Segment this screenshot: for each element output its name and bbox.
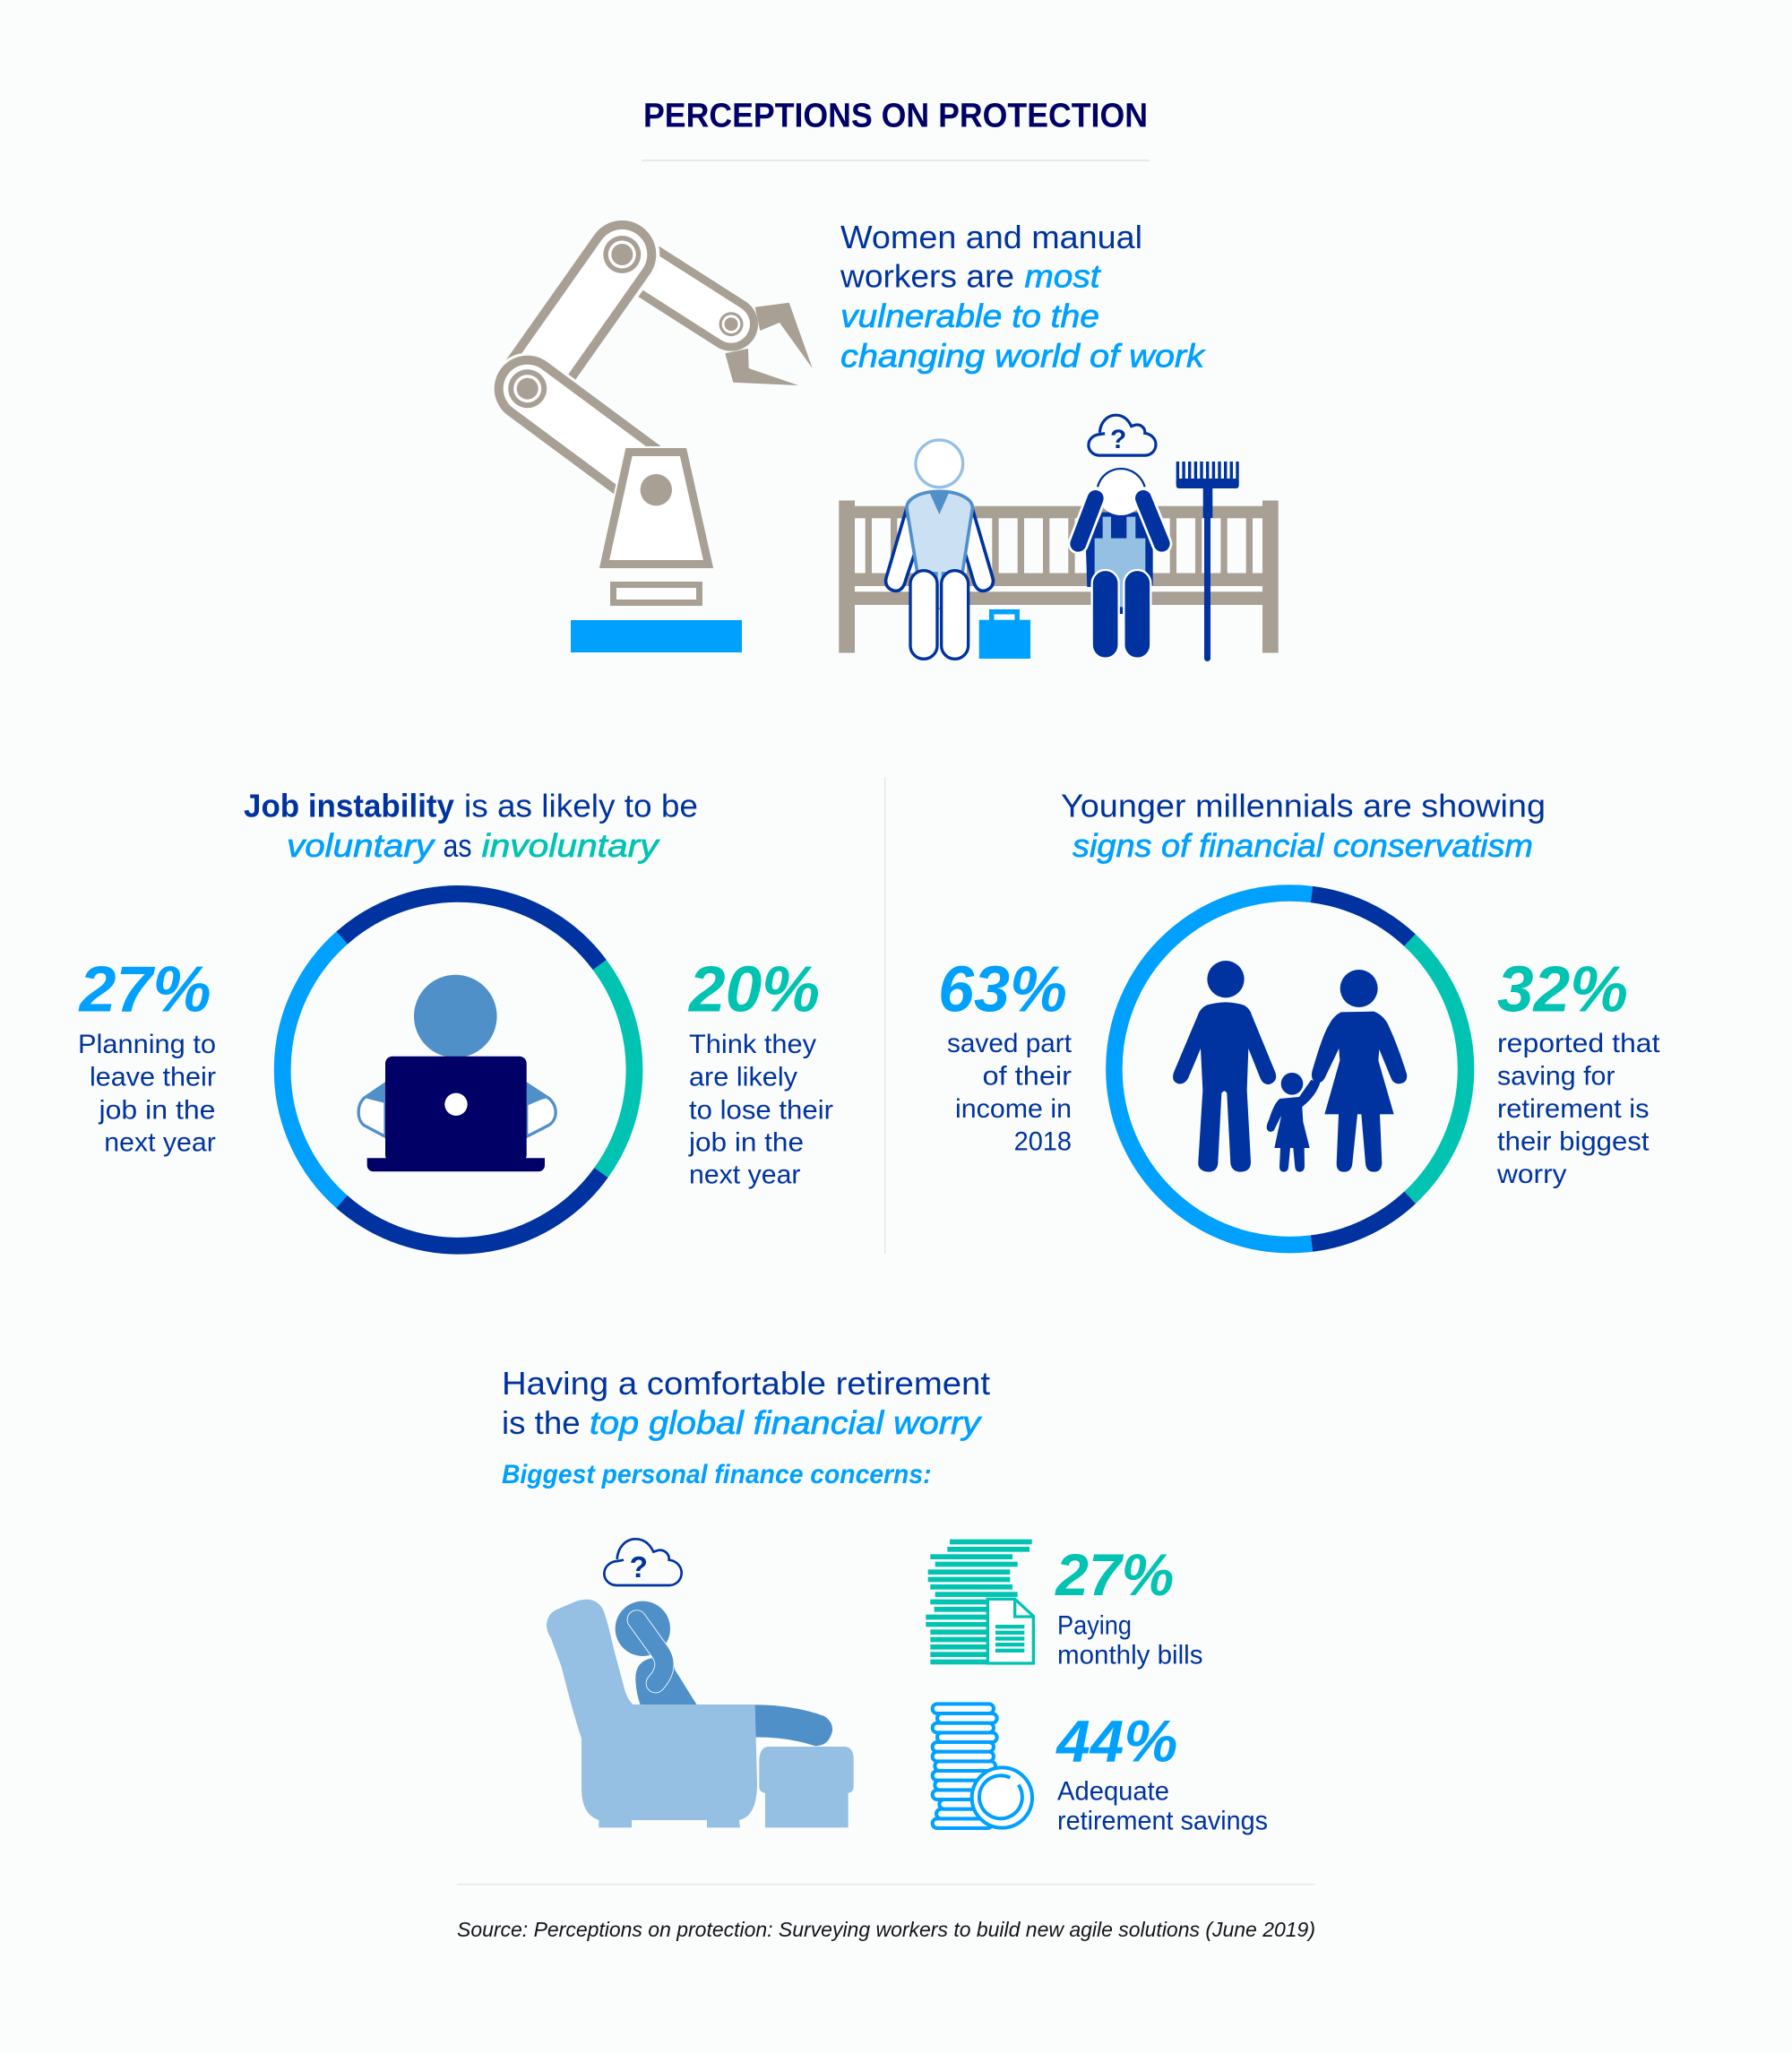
icon: rake [1176,462,1239,661]
stat: 32% retirement worry [1496,954,1660,1189]
stat: 20% think they may lose job: next year [689,1161,801,1190]
heading: comfortable retirement: top global financial worry [590,1404,982,1441]
stat: 27% planning to leave [78,954,216,1157]
title: PERCEPTIONS ON PROTECTION [643,98,1148,135]
stat: 27% planning to leave: next year [104,1127,216,1157]
stat: 27% paying monthly bills: Paying [1057,1610,1132,1640]
heading: younger millennials: Younger millennials are showing [1061,788,1546,824]
heading: younger millennials: signs of financial conservatism [1073,827,1533,864]
heading: job instability: is as likely to be [464,788,698,824]
stat: 20% think they may lose job: job in the [688,1127,804,1157]
icon: family [1173,961,1407,1172]
stat: 27% paying monthly bills: 27% [1054,1541,1174,1608]
icon: manual worker on bench [1078,468,1162,659]
icon: person in armchair with thought cloud: ? [630,1551,648,1584]
stat: 27% planning to leave: 27% [78,954,211,1025]
heading: comfortable retirement: Biggest personal finance concerns: [502,1460,932,1489]
donut: millennials ring [1114,893,1466,1245]
stat: 32% retirement worry: worry [1496,1160,1566,1189]
headline: women and manual workers: workers are [840,258,1014,294]
stat: 63% saved [938,954,1073,1157]
heading: younger millennials [1061,788,1546,864]
icon: thought cloud with question mark: ? [1110,425,1126,454]
stat: 32% retirement worry: their biggest [1497,1127,1650,1157]
icon: thought cloud with question mark [1089,415,1156,455]
stat: 27% planning to leave: leave their [90,1063,216,1092]
stat: 32% retirement worry: 32% [1497,954,1628,1025]
stat: 63% saved: saved part [947,1029,1073,1058]
heading: job instability [244,788,698,864]
heading: comfortable retirement: is the [502,1404,581,1441]
stat: 27% paying monthly bills [1054,1541,1202,1670]
icon: bench [839,500,1279,652]
stat: 63% saved: income in [955,1094,1072,1124]
stat: 27% planning to leave: Planning to [78,1030,216,1059]
icon: stack of bills [926,1540,1033,1664]
heading: job instability: voluntary [287,827,435,864]
stat: 44% adequate retirement savings [1055,1708,1268,1836]
headline: women and manual workers: changing world of work [840,337,1206,374]
stat: 27% planning to leave: job in the [98,1095,215,1125]
heading: job instability: as [443,827,471,864]
stat: 32% retirement worry: saving for [1497,1062,1615,1092]
headline: women and manual workers: most [1025,258,1102,294]
stat: 20% think they may lose job: 20% [687,954,820,1025]
icon: robot arm [508,236,813,652]
source note: Source: Perceptions on protection: Surveying workers to build new agile solutions (June 2019) [457,1918,1315,1941]
stat: 20% think they may lose job [687,954,833,1190]
stat: 44% adequate retirement savings: retirement savings [1057,1807,1268,1836]
heading: comfortable retirement: Having a comfortable retirement [502,1365,990,1402]
icon: stack of coins [933,1704,1032,1828]
donut: job instability ring [282,893,634,1246]
stat: 63% saved: 63% [938,954,1067,1025]
icon: person in armchair with thought cloud [547,1539,854,1827]
stat: 20% think they may lose job: are likely [689,1063,797,1092]
icon: person with laptop [358,975,556,1171]
stat: 63% saved: of their [982,1062,1072,1092]
stat: 44% adequate retirement savings: Adequate [1057,1776,1169,1806]
icon: office worker on bench [886,440,993,659]
stat: 32% retirement worry: retirement is [1497,1094,1649,1124]
icon: briefcase [979,612,1030,659]
headline: women and manual workers: vulnerable to the [840,298,1099,334]
heading: comfortable retirement [502,1365,990,1489]
stat: 27% paying monthly bills: monthly bills [1057,1641,1202,1670]
heading: job instability: involuntary [482,827,660,864]
stat: 63% saved: 2018 [1014,1127,1072,1157]
stat: 32% retirement worry: reported that [1497,1029,1660,1058]
stat: 20% think they may lose job: to lose their [689,1095,833,1125]
headline: women and manual workers [840,219,1206,374]
headline: women and manual workers: Women and manual [840,219,1142,255]
stat: 20% think they may lose job: Think they [689,1030,816,1059]
heading: job instability: Job instability [244,788,454,824]
stat: 44% adequate retirement savings: 44% [1055,1708,1177,1774]
